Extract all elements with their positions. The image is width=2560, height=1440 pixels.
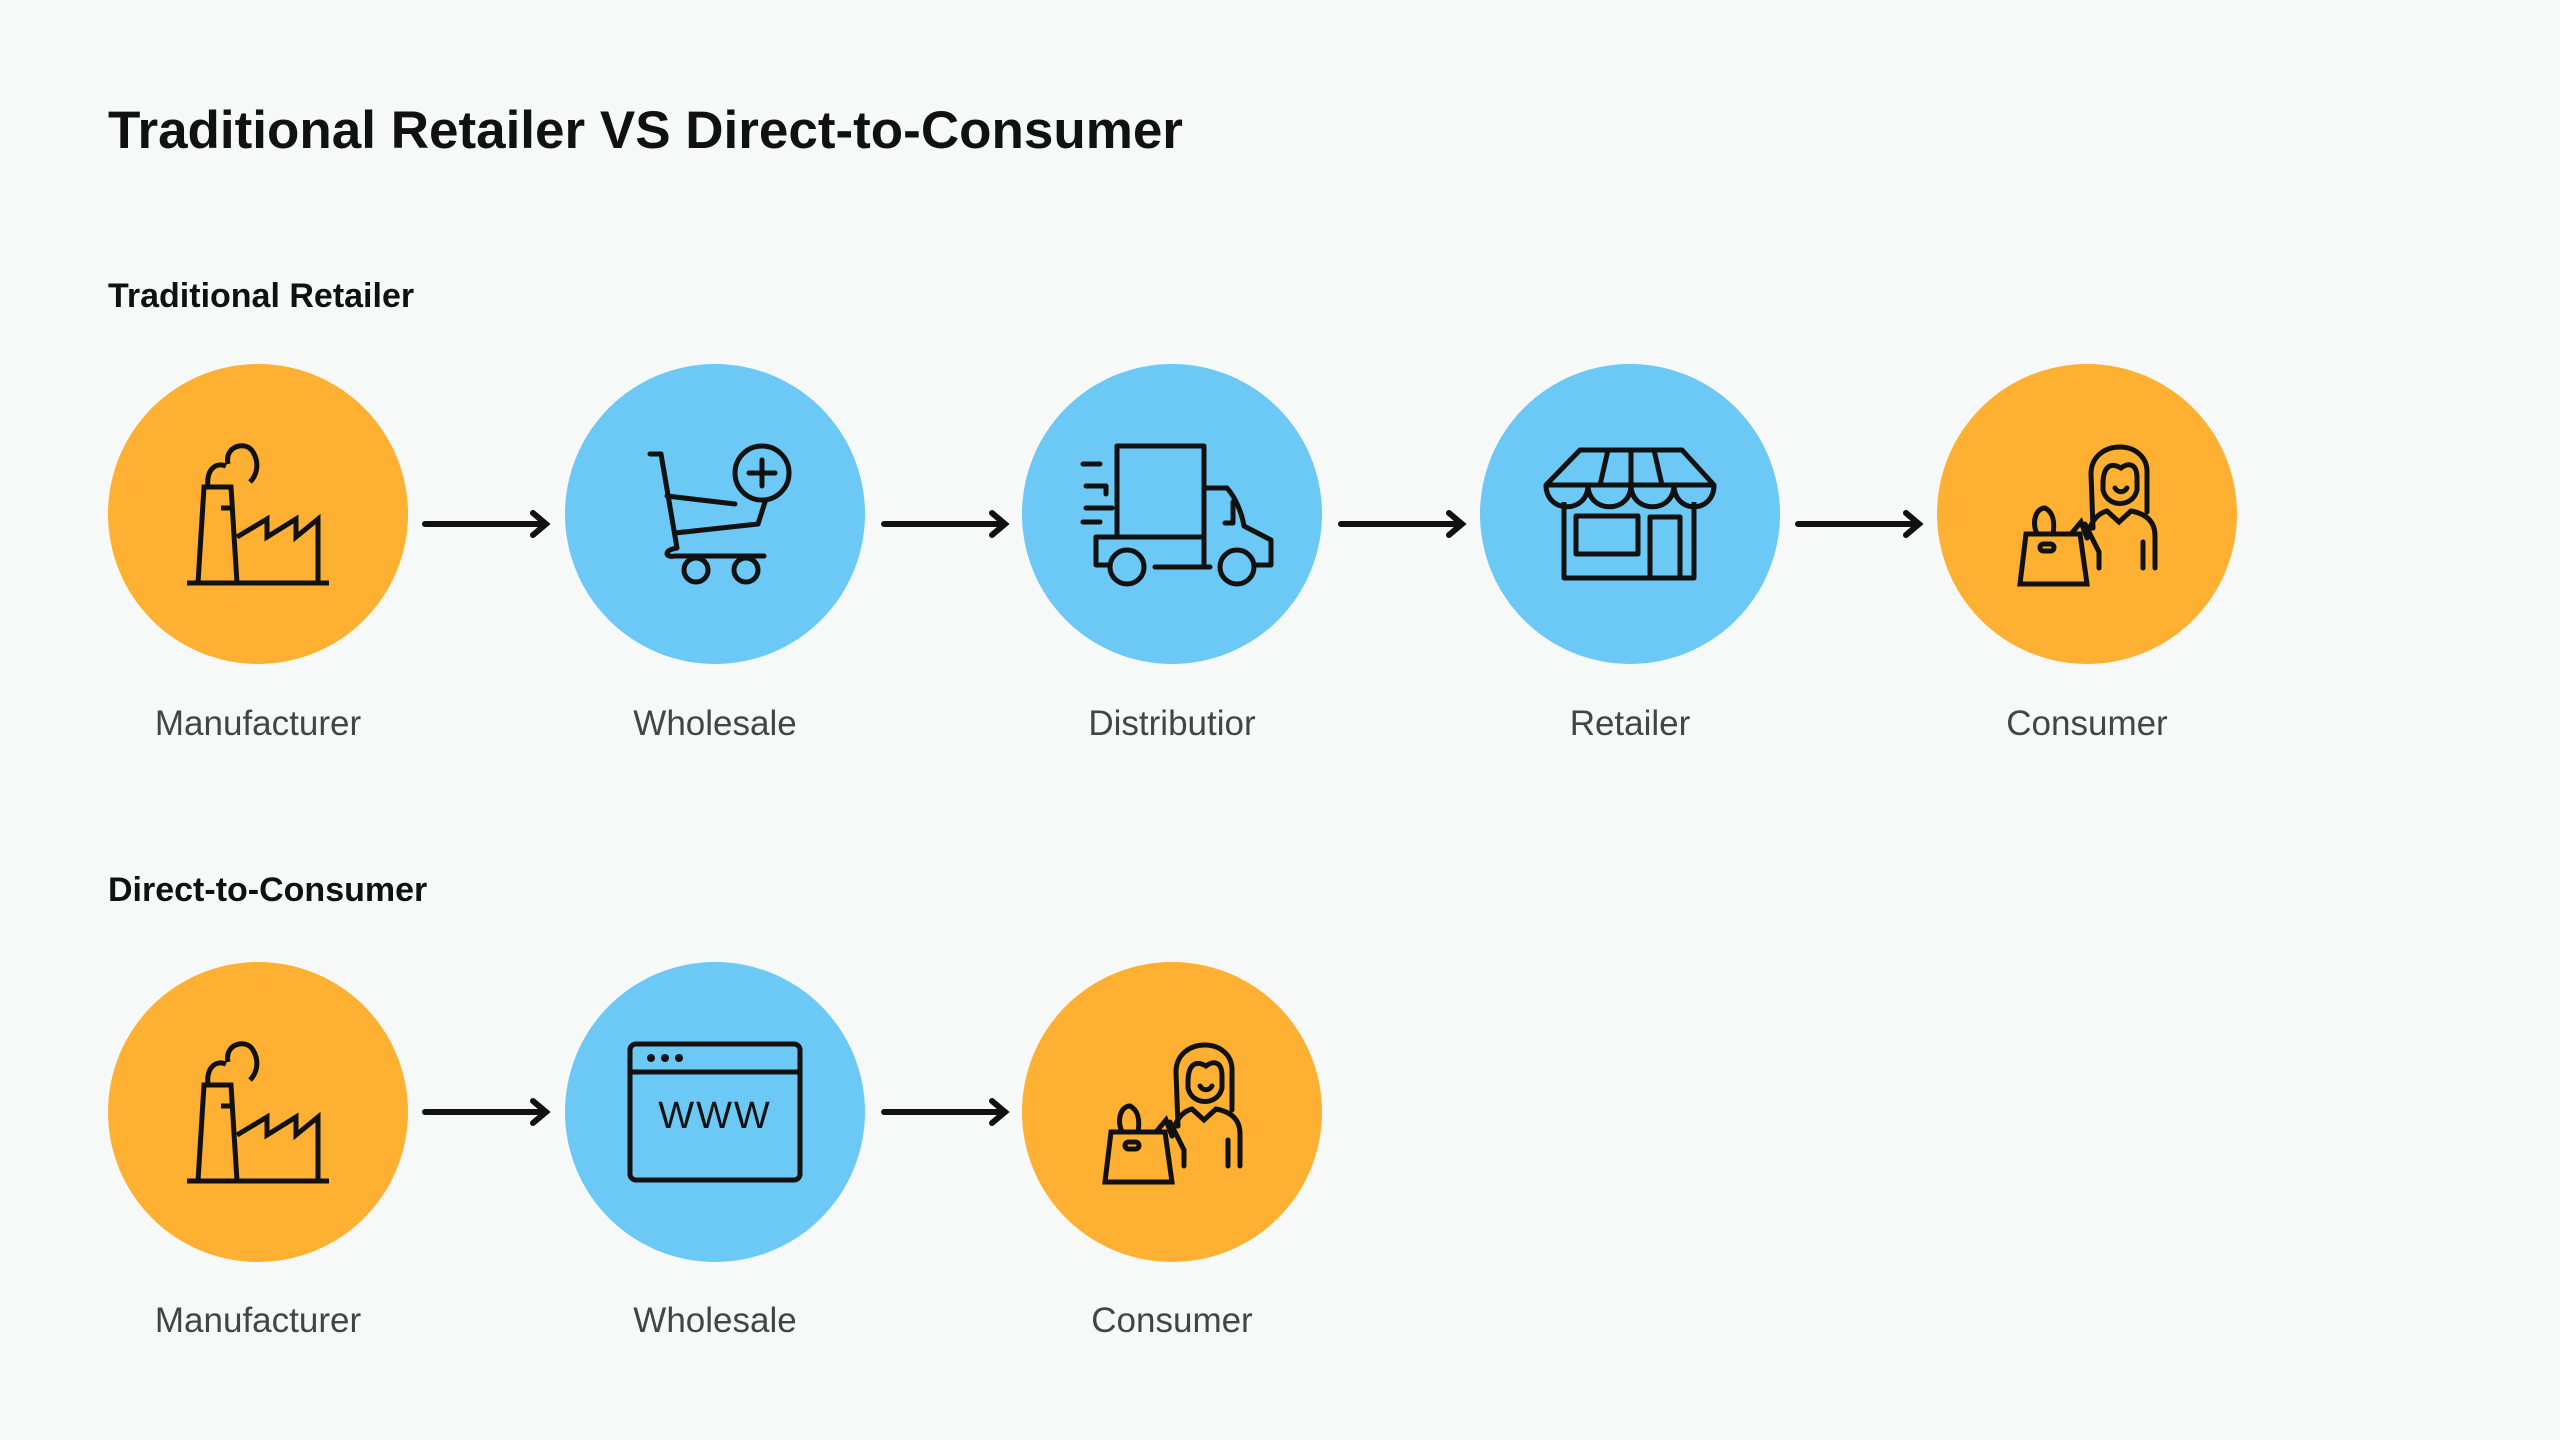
node: Manufacturer 2 [108, 962, 408, 1340]
row: traditional [108, 364, 2237, 743]
node: Consumer: Consumer [2006, 704, 2168, 743]
heading: Direct-to-Consumer: Direct-to-Consumer [108, 871, 427, 909]
arrow 5 [425, 1101, 546, 1123]
arrow 6 [884, 1101, 1005, 1123]
node: Wholesale (web): Wholesale [633, 1301, 797, 1340]
node: Consumer [1937, 364, 2237, 743]
arrow 3 [1341, 513, 1462, 535]
arrow 2 [884, 513, 1005, 535]
node: Manufacturer 2: Manufacturer [155, 1301, 361, 1340]
node: Consumer 2 [1022, 962, 1322, 1340]
row: direct [108, 962, 1322, 1340]
arrow 4 [1798, 513, 1919, 535]
node: Retailer [1480, 364, 1780, 743]
node: Consumer 2: Consumer [1091, 1301, 1253, 1340]
node: Distributior [1022, 364, 1322, 743]
node: Wholesale (web) [565, 962, 865, 1340]
heading: Traditional Retailer: Traditional Retailer [108, 277, 414, 315]
title: Traditional Retailer VS Direct-to-Consumer [108, 101, 1183, 160]
node: Manufacturer: Manufacturer [155, 704, 361, 743]
node: Retailer: Retailer [1570, 704, 1691, 743]
node: Wholesale [565, 364, 865, 743]
arrow 1 [425, 513, 546, 535]
node: Wholesale: Wholesale [633, 704, 797, 743]
node: Wholesale (web): WWW [658, 1095, 772, 1137]
node: Manufacturer [108, 364, 408, 743]
node: Distributior: Distributior [1088, 704, 1256, 743]
